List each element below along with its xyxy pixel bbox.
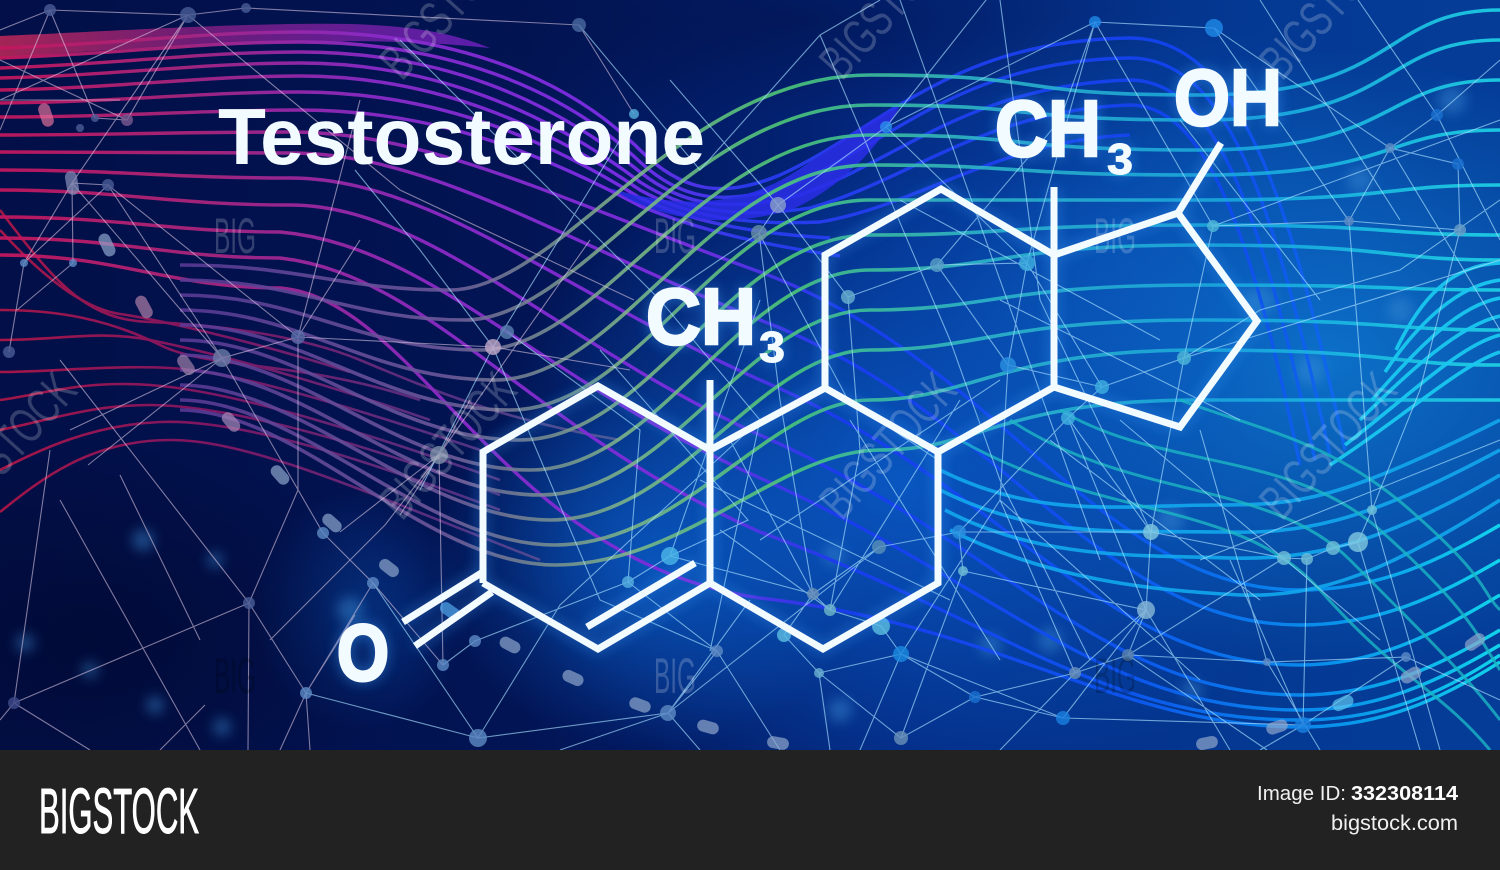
magenta band top left (0, 24, 490, 58)
ring bonds (483, 189, 1257, 649)
footer bar: BIGSTOCK (39, 775, 199, 847)
network lines right (306, 0, 1500, 750)
wave bundle: teal diagonals (960, 400, 1500, 750)
substituent and double bonds (403, 143, 1221, 646)
wave bundle: green to cyan (180, 10, 1500, 565)
label: upper methyl: CH (995, 84, 1101, 173)
watermarks: BIG (214, 208, 256, 264)
network lines left (0, 8, 634, 750)
wave bundle: cyan hill right (1330, 263, 1500, 465)
bokeh glows (16, 86, 1466, 736)
label: ketone oxygen: O (337, 608, 389, 697)
image id label: Image ID: (1257, 783, 1346, 805)
blue-violet thick band (610, 105, 900, 220)
wave bundle: purple top arcs to blue (0, 32, 1345, 465)
label: lower methyl subscript: 3 (759, 323, 785, 372)
watermarks: BIGSTOCK (809, 362, 967, 529)
watermarks: BIG (1094, 648, 1136, 704)
watermarks: BIG (654, 208, 696, 264)
capsule particles (37, 102, 1487, 751)
watermarks: BIGSTOCK (1249, 362, 1407, 529)
watermarks: BIG (214, 648, 256, 704)
wave bundle: red arcs left (0, 210, 620, 560)
watermarks (0, 0, 1407, 704)
wave bundle: purple to blue lower (0, 132, 1500, 727)
label: hydroxyl: OH (1174, 53, 1282, 142)
testosterone molecule diagram (337, 53, 1282, 697)
footer bar (0, 750, 1500, 870)
wave bundle: blue-cyan right fan (940, 420, 1500, 595)
label: upper methyl subscript: 3 (1107, 135, 1133, 184)
watermarks: BIG (1094, 208, 1136, 264)
watermarks: BIGSTOCK (369, 362, 527, 529)
site url: bigstock.com (1331, 812, 1458, 835)
title: Testosterone (218, 92, 705, 181)
label: lower methyl: CH (646, 272, 756, 361)
watermarks: BIG (654, 648, 696, 704)
image id number: 332308114 (1351, 783, 1459, 805)
